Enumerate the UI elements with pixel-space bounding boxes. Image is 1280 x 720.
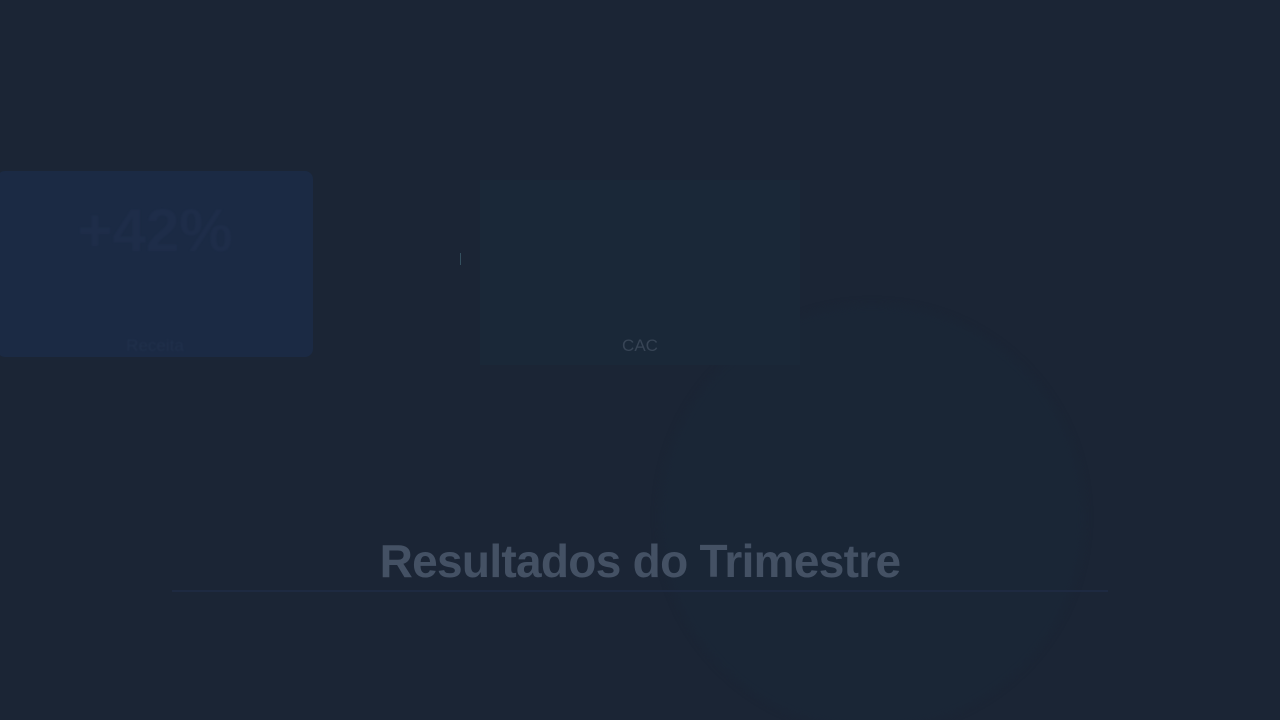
- title: Resultados do Trimestre: [380, 535, 900, 587]
- circle shape: [660, 305, 1084, 720]
- panel: receita metric card: [0, 171, 313, 357]
- background circle: [650, 290, 1095, 720]
- title underline: [172, 590, 1108, 592]
- metric label: CAC: CAC: [622, 336, 658, 355]
- small tick mark: [460, 253, 461, 265]
- metric label: Receita: Receita: [126, 336, 184, 355]
- panel: CAC metric card: [480, 180, 800, 365]
- metric value: +42%: +42%: [77, 197, 233, 264]
